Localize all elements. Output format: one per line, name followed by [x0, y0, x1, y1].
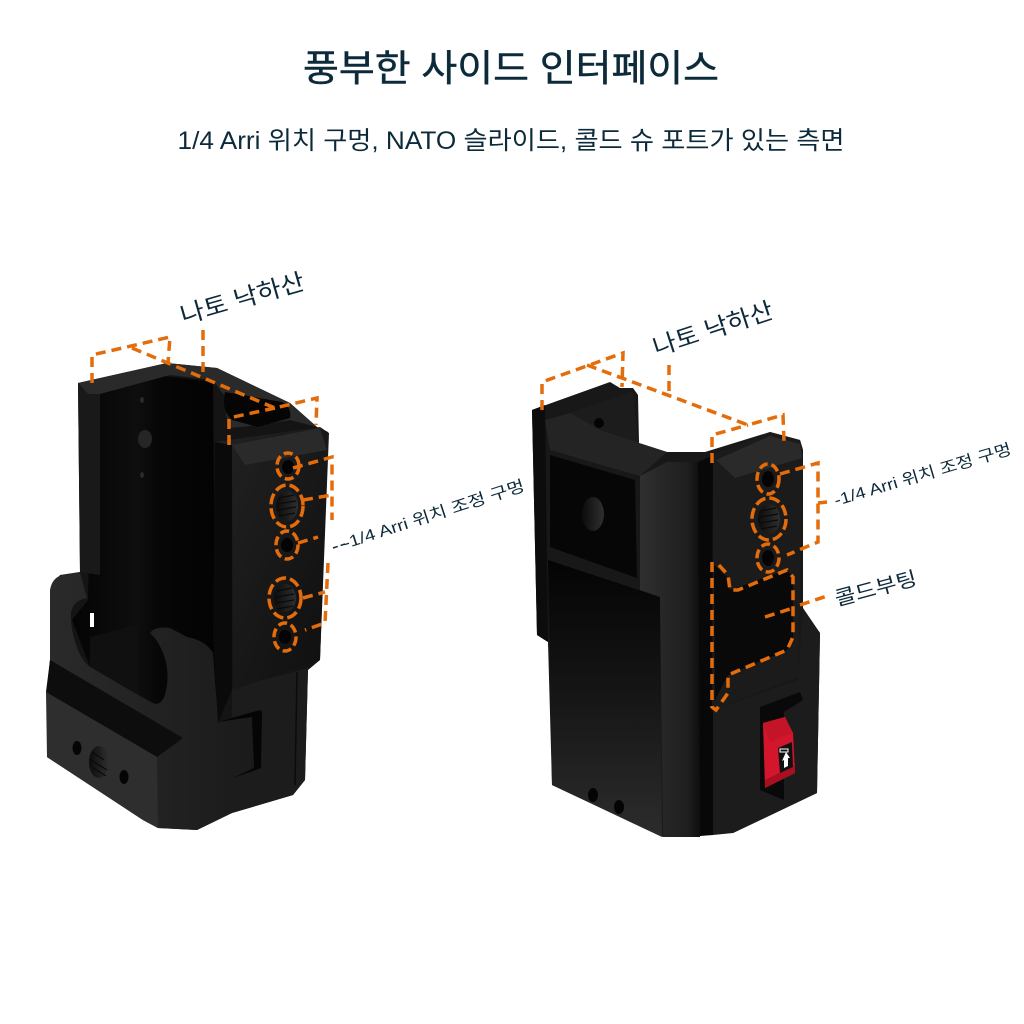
plate bevel	[716, 436, 802, 478]
subtitle: 1/4 Arri 위치 구멍, NATO 슬라이드, 콜드 슈 포트가 있는 측면	[178, 127, 845, 155]
left edge strip	[78, 383, 100, 575]
side rail	[213, 442, 232, 722]
rear interior floor	[90, 625, 137, 693]
right holes	[758, 471, 780, 566]
top slot	[224, 392, 290, 427]
rear interior screw holes	[138, 397, 152, 478]
recessed plate	[550, 455, 637, 578]
lower right housing	[713, 610, 820, 835]
front lower face	[46, 692, 158, 828]
plate bevel	[232, 428, 327, 465]
left product: cage front view	[46, 363, 329, 830]
back body	[47, 363, 328, 830]
right product: orange annotations	[542, 353, 830, 710]
lower front face	[548, 560, 662, 837]
top screw hole	[594, 418, 604, 428]
left product: orange annotations	[92, 330, 332, 651]
arri hole markers	[269, 453, 332, 651]
plate threaded hole	[582, 497, 604, 531]
rear seam	[295, 672, 297, 785]
inner top wall	[570, 392, 638, 443]
right label: arri holes: -1/4 Arri 위치 조정 구멍	[832, 440, 1014, 510]
right label: cold boot: 콜드부팅	[832, 567, 919, 611]
cold shoe outline	[712, 562, 830, 710]
left callout leader	[333, 544, 345, 548]
front holes	[72, 741, 128, 784]
bottom screw holes	[588, 788, 624, 814]
left edge strip	[532, 405, 548, 642]
left label: nato: 나토 낙하산	[177, 269, 308, 330]
center side face	[640, 462, 700, 837]
right product: cage rear side view	[532, 382, 820, 837]
nato rail outline	[542, 353, 784, 463]
lower rear body	[232, 668, 308, 813]
plate holes	[274, 460, 298, 644]
nato rail outline	[92, 330, 317, 445]
interior channel	[72, 376, 216, 705]
dark seam	[698, 455, 713, 836]
front dark band	[46, 660, 183, 757]
left label: arri holes: -1/4 Arri 위치 조정 구멍	[341, 477, 527, 553]
cold shoe window	[714, 565, 793, 700]
shoulder	[545, 413, 667, 476]
button recess	[760, 692, 803, 800]
gap through ear	[90, 613, 94, 627]
right label: nato: 나토 낙하산	[650, 297, 777, 362]
red latch button	[763, 717, 795, 788]
top rim	[78, 363, 317, 428]
title: 풍부한 사이드 인터페이스	[303, 48, 719, 89]
right plate	[712, 432, 803, 710]
arri hole markers	[752, 463, 827, 572]
hinge slot	[218, 710, 262, 778]
front clamp base	[47, 572, 260, 830]
body silhouette	[532, 382, 820, 837]
right plate	[215, 427, 329, 690]
